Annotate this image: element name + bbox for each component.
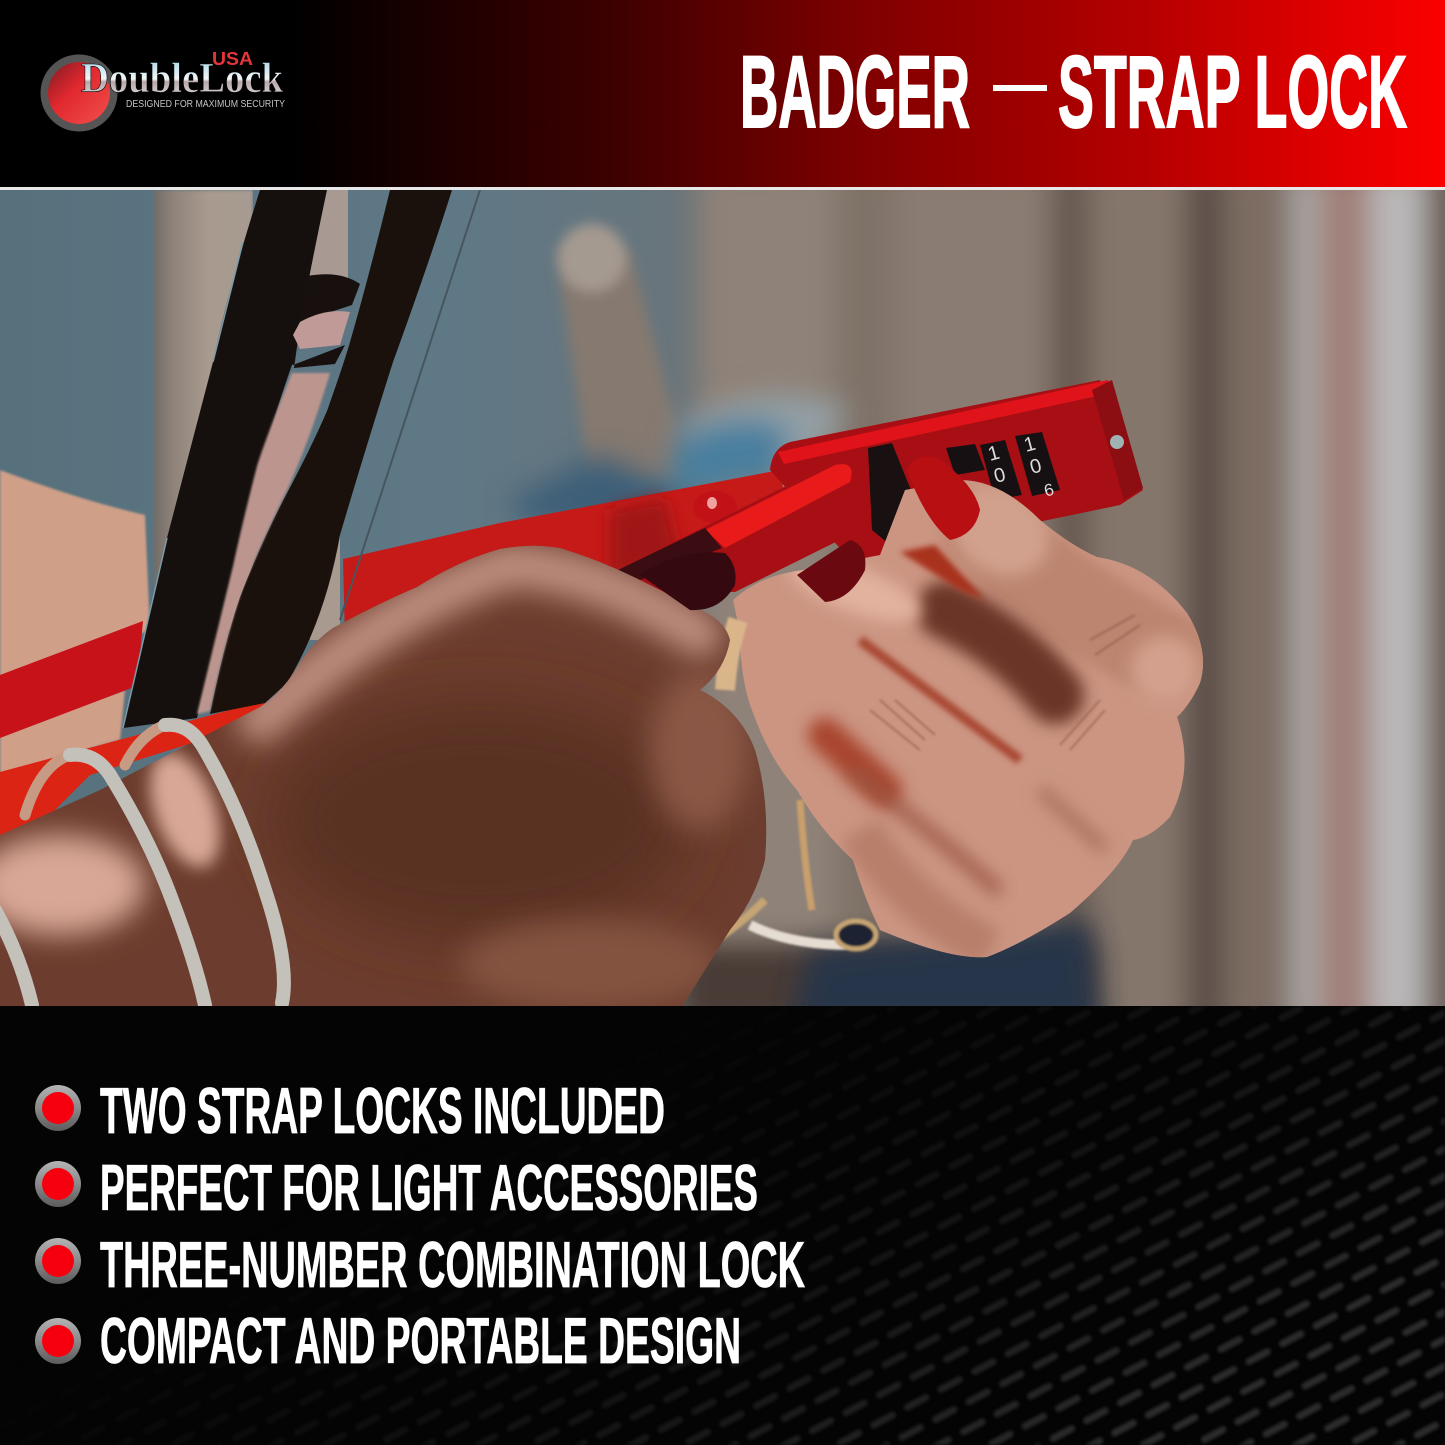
- strap stud: [693, 491, 737, 523]
- wrist highlight: [0, 835, 145, 935]
- lock body: [770, 380, 1143, 565]
- feature: two strap locks: TWO STRAP LOCKS INCLUDED: [100, 1074, 665, 1147]
- logo: DoubleLock USA: [34, 46, 296, 138]
- icon: logo disc: [40, 54, 118, 132]
- lock combination wheels: 9: [1042, 479, 1056, 500]
- blurred post: [153, 190, 348, 640]
- index fingertip: [952, 482, 1052, 580]
- gold bracelets: [708, 620, 876, 949]
- index knuckle end: [1131, 636, 1199, 704]
- feature: two strap locks: [35, 1074, 665, 1147]
- header band: [0, 0, 1445, 190]
- lock release slider: [868, 443, 910, 542]
- red index nail: [907, 456, 980, 540]
- photo: hands locking a bicycle with a red strap lock: [0, 170, 1445, 1030]
- logo USA mark: USA: [212, 49, 253, 69]
- feature: light accessories: PERFECT FOR LIGHT ACCESSORIES: [100, 1151, 758, 1224]
- photo background: [0, 170, 1445, 1030]
- lock combination wheels: [946, 432, 1060, 500]
- left hand: [0, 530, 790, 1020]
- lower hand shading: [860, 830, 990, 950]
- blurred blue object: [510, 396, 1100, 1030]
- feature: compact design: COMPACT AND PORTABLE DESIGN: [100, 1304, 741, 1377]
- blurred background pole: [555, 224, 690, 480]
- title: [740, 35, 1407, 149]
- lock combination wheels: 1: [986, 442, 1002, 466]
- right hand: [733, 480, 1203, 958]
- logo wordmark: DoubleLock: [81, 56, 284, 102]
- knuckle glow: [650, 670, 750, 830]
- dorsal shading: [270, 700, 690, 940]
- bicycle frame: [123, 190, 480, 728]
- feature: compact design: [35, 1304, 741, 1377]
- reflected red beside index finger: [900, 545, 985, 600]
- silver bangles: [0, 725, 284, 1005]
- feature: combination lock: THREE-NUMBER COMBINATION LOCK: [100, 1228, 805, 1301]
- red strap: [0, 470, 790, 835]
- dark thumb nail: [640, 552, 736, 610]
- right hand index finger: [985, 530, 1165, 655]
- shadow between fingers: [945, 610, 1055, 695]
- bottom panel: feature list: [0, 1006, 1445, 1445]
- fingertip highlight: [788, 566, 930, 626]
- red strap lock: [618, 380, 1143, 592]
- middle finger shadow edge: [860, 640, 1020, 760]
- carbon weave texture: [280, 1006, 1445, 1445]
- upper edge highlight: [260, 565, 700, 720]
- lock key tab: [640, 486, 835, 592]
- title: BADGER: [740, 35, 970, 149]
- logo tagline: DESIGNED FOR MAXIMUM SECURITY: [126, 98, 285, 110]
- lock combination wheels: 0: [992, 464, 1008, 488]
- lock combination wheels: 1: [1022, 433, 1038, 457]
- lock combination wheels: 0: [1028, 455, 1044, 479]
- feature: light accessories: [35, 1151, 758, 1224]
- ring finger shadow: [825, 735, 885, 790]
- feature: combination lock: [35, 1228, 805, 1301]
- knuckle creases: [870, 615, 1140, 750]
- left forearm background: [0, 470, 150, 775]
- crimson nail: [797, 540, 865, 602]
